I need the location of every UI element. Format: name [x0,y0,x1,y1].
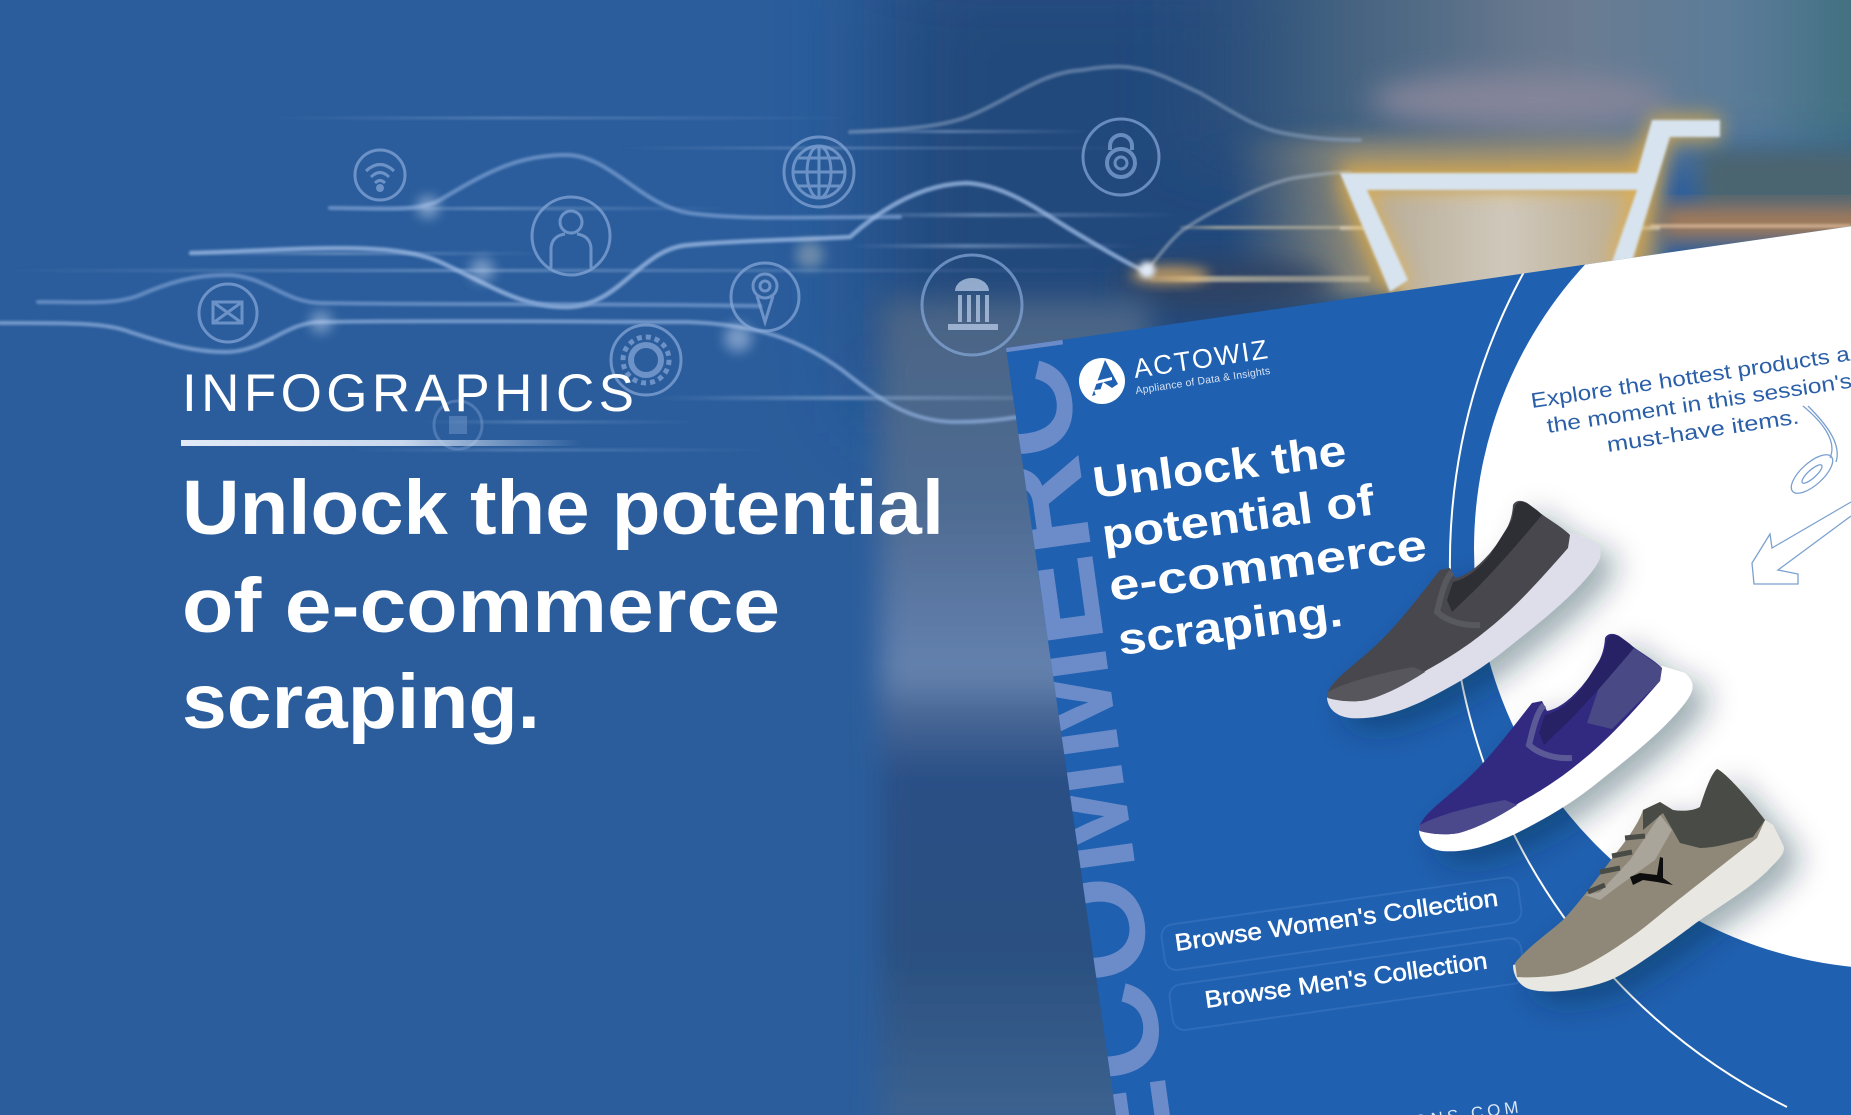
wave upper left [330,155,900,218]
white circle [1474,226,1851,967]
wave mail loop upper [38,275,760,306]
shoe: dark slip-on [1327,501,1601,718]
main heading [182,465,944,745]
icon: location pin [731,263,799,331]
main heading: scraping. [182,659,540,745]
icon: wifi [355,150,405,200]
thin arc line [1450,270,1787,1107]
icon: small badge [434,401,482,449]
shoe: grey sneaker [1513,769,1784,992]
poster heading: scraping. [1115,587,1345,665]
icon: globe [784,137,854,207]
explore note [1532,350,1851,452]
logo mark [1079,358,1125,404]
icon: bank [922,255,1022,355]
icon: padlock [1083,119,1159,195]
wave to cart [1147,172,1350,270]
logo [1079,334,1271,404]
explore note: Explore the hottest products a [1529,343,1851,413]
network lines [0,67,1851,451]
poster heading: potential of [1099,476,1377,560]
icon: gear [611,325,681,395]
main heading: of e-commerce [182,563,780,649]
wave mail loop lower [0,321,1018,422]
icon: mail [199,284,257,342]
logo tagline: Appliance of Data & Insights [1135,365,1271,397]
arrow: doodle [1752,406,1851,584]
icon: user [532,197,610,275]
poster heading: e-commerce [1106,521,1430,611]
eyebrow: INFOGRAPHICS: INFOGRAPHICS [182,364,634,423]
icons row [199,119,1159,449]
poster heading: Unlock the [1090,426,1349,508]
button: men's collection [1168,937,1526,1032]
cart glow [1340,128,1720,290]
puma logo [1630,857,1673,885]
logo wordmark: ACTOWIZ [1131,334,1269,384]
button: men's collection: Browse Men's Collection [1203,948,1489,1014]
explore note: must-have items. [1605,406,1801,457]
button: women's collection [1160,876,1523,972]
button: women's collection: Browse Women's Collection [1173,885,1500,957]
icon: shopping cart [1340,120,1720,300]
main heading: Unlock the potential [182,465,944,551]
wave top right [850,67,1360,140]
cart basket fill [1362,188,1640,300]
panel: tilted poster [1006,226,1851,1115]
glowing nodes [310,196,1210,352]
poster heading [1094,439,1426,654]
cart bars [1340,120,1720,292]
divider rule [181,440,582,446]
explore note: the moment in this session's [1545,370,1851,438]
wave bright main [191,183,1146,307]
horizontal light streaks [0,117,1851,451]
shoe: navy slip-on [1419,634,1693,851]
